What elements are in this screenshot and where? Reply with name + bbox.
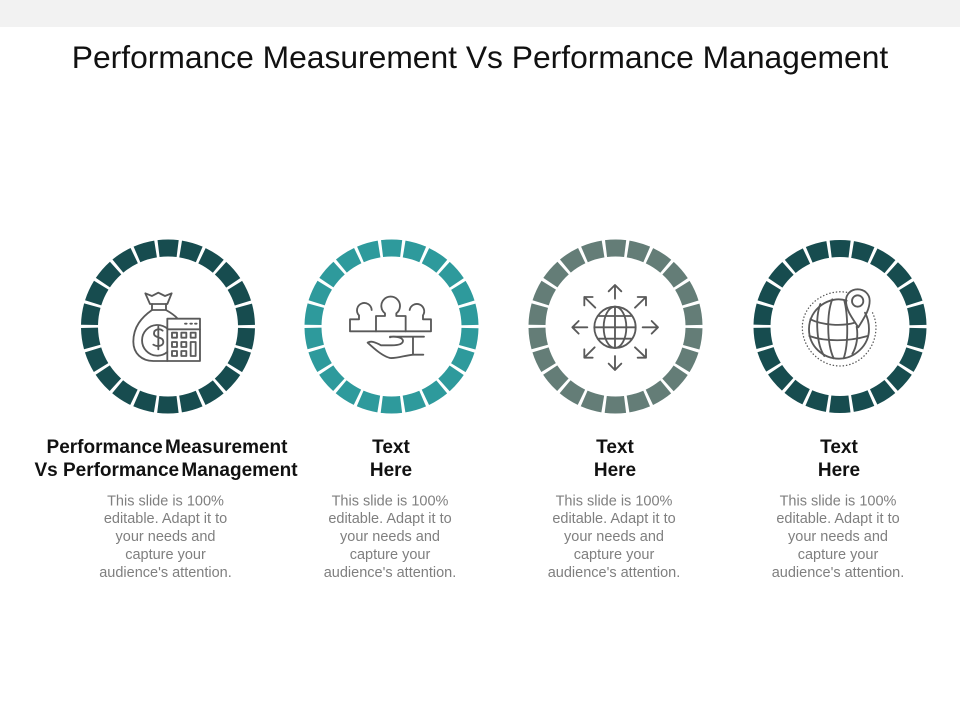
heading 3: Text <box>596 437 634 458</box>
body 1: your needs and <box>116 529 215 545</box>
body 2: your needs and <box>340 529 440 545</box>
ring 4 <box>762 248 918 404</box>
heading 1 second line: Vs Performance Management <box>34 460 298 481</box>
heading 1: Performance Measurement <box>47 437 288 458</box>
heading 2 second line: Here <box>370 460 412 481</box>
icon: globe with location pin <box>802 289 876 366</box>
body 3: This slide is 100% <box>556 494 673 510</box>
body 4: your needs and <box>788 529 888 545</box>
body 4: capture your <box>798 547 878 563</box>
body 3: audience's attention. <box>548 565 680 581</box>
ring 1 <box>90 248 246 405</box>
body 4: editable. Adapt it to <box>776 511 900 527</box>
ring 2 <box>313 248 470 405</box>
title: Performance Measurement Vs Performance Management <box>72 39 888 75</box>
panel: performance measurement <box>34 248 298 581</box>
panel: globe with arrows <box>537 248 694 581</box>
body 1: capture your <box>125 547 206 563</box>
body 1: This slide is 100% <box>107 494 224 510</box>
body 4: audience's attention. <box>772 565 904 581</box>
body 1: audience's attention. <box>99 565 232 581</box>
body 1: editable. Adapt it to <box>104 511 227 527</box>
body 3: editable. Adapt it to <box>552 511 676 527</box>
panel: people on hand <box>313 248 470 581</box>
heading 4: Text <box>820 437 858 458</box>
body 3: your needs and <box>564 529 664 545</box>
icon: people on open hand <box>350 297 431 358</box>
body 4: This slide is 100% <box>780 494 897 510</box>
heading 3 second line: Here <box>594 460 636 481</box>
top band <box>0 0 960 27</box>
ring 3 <box>537 248 694 405</box>
icon: globe with outward arrows <box>572 285 658 370</box>
body 3: capture your <box>574 547 654 563</box>
icon: money bag and calculator <box>133 293 200 361</box>
body 2: This slide is 100% <box>332 494 449 510</box>
panel: globe with location pin <box>762 248 918 581</box>
heading 4 second line: Here <box>818 460 860 481</box>
body 2: capture your <box>350 547 430 563</box>
body 2: editable. Adapt it to <box>328 511 452 527</box>
body 2: audience's attention. <box>324 565 456 581</box>
heading 2: Text <box>372 437 410 458</box>
